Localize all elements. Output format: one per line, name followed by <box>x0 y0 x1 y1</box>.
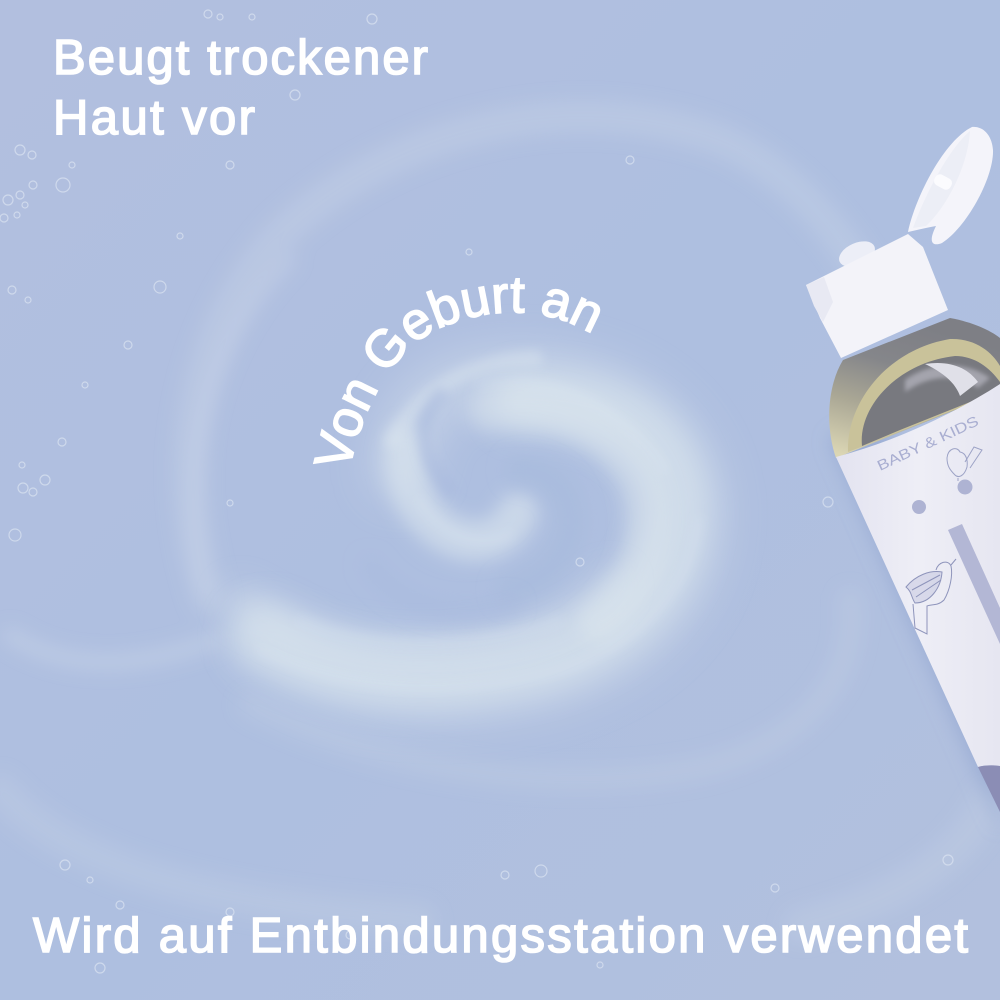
cap nozzle <box>835 236 879 272</box>
bottle <box>806 127 1000 830</box>
swirl dark gap <box>370 565 510 612</box>
swirl lower arm <box>240 585 610 651</box>
bottom caption: Wird auf Entbindungsstation verwendet <box>33 909 968 963</box>
title <box>53 31 428 145</box>
swirl lower band <box>260 402 676 674</box>
bird ball <box>958 480 972 494</box>
swirl upper band <box>490 406 648 620</box>
curved label: Von Geburt an <box>313 278 600 464</box>
milky central swirl <box>240 358 700 693</box>
bottle cap <box>806 234 948 358</box>
title: Haut vor <box>53 91 255 145</box>
small dot <box>912 500 926 514</box>
label bar <box>948 524 1000 644</box>
swirl halo <box>270 375 696 693</box>
cap shading <box>806 277 833 322</box>
swirl left dark gap <box>424 395 450 490</box>
swirl inner arm <box>404 445 518 541</box>
glass highlight <box>925 363 978 396</box>
bottle label <box>836 384 1000 767</box>
bottle glass shoulder <box>829 318 1000 458</box>
top bird <box>947 447 982 481</box>
bottle base <box>978 765 1000 812</box>
label text: BABY & KIDS <box>875 414 981 475</box>
bottle shadow <box>829 420 1000 830</box>
glass inner <box>862 356 1000 446</box>
swirl arc <box>392 358 535 440</box>
flip lid <box>908 127 993 244</box>
glass upper sheen <box>905 365 990 392</box>
lid inner <box>913 131 970 228</box>
swirl streaks <box>260 382 700 687</box>
oil ring <box>848 339 1000 452</box>
lower bird <box>906 559 956 634</box>
lid pin <box>932 172 954 192</box>
title: Beugt trockener <box>53 31 428 85</box>
swirl dark core <box>510 470 572 590</box>
